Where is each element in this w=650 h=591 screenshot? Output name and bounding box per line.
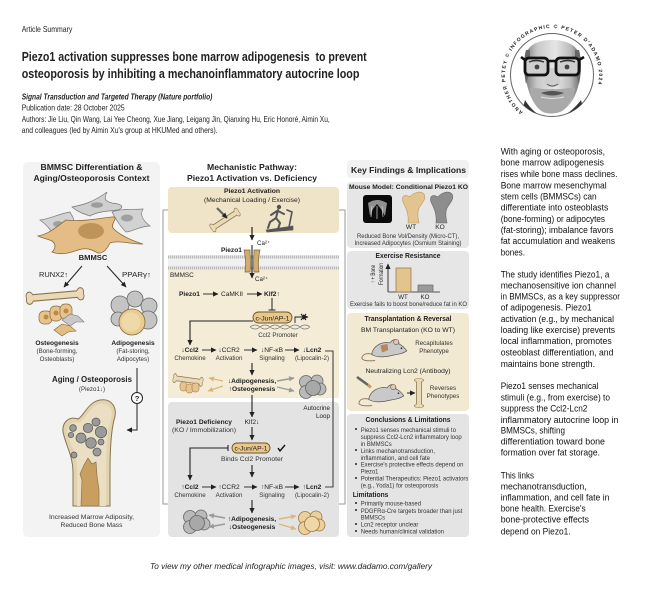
label: deficiency: Piezo1 Deficiency (176, 419, 232, 426)
row: upregulated cascade: ↑Ccl2 (181, 484, 199, 491)
labels: WT and KO: KO (435, 224, 445, 231)
icon: micro-CT (363, 195, 392, 223)
signalling row: CaMKII (221, 291, 243, 298)
citation details: and colleagues (led by Aimin Xu's group at HKUMed and others). (22, 125, 218, 135)
paragraph: mechanism: formation over fat storage. (501, 448, 600, 458)
arrows: grey outcome (209, 515, 225, 527)
arrows: tan outcome (208, 378, 223, 391)
label: binds promoter: Binds Ccl2 Promoter (221, 456, 283, 463)
list: conclusions: Potential Therapeutics: Piezo1 activators (361, 476, 468, 482)
citation details: Authors: Jie Liu, Qin Wang, Lai Yee Cheong, Xue Jiang, Leigang Jin, Qianxing Hu, Eric Honoré, Aimin Xu, (22, 114, 330, 124)
arrow: cascade to outcome (251, 500, 253, 513)
caption: mouse model: Reduced Bone Vol/Density (Micro-CT), (357, 233, 459, 240)
paragraph: mechanism (501, 381, 618, 458)
heading: aging: (Piezo1↓) (79, 386, 105, 393)
icon: grey adipocytes (300, 375, 326, 398)
signalling row (179, 291, 280, 298)
list: conclusions: Links mechanotransduction, (361, 448, 435, 455)
row: upregulated cascade (174, 484, 329, 499)
labels: WT and KO (406, 224, 445, 231)
label: adipogenesis: (Fat-storing, (116, 348, 150, 355)
paragraph: implication: bone-protective effects (501, 515, 589, 525)
footer note: To view my other medical infographic images, visit: www.dadamo.com/gallery (150, 561, 433, 571)
icon: check (278, 445, 285, 451)
row: upregulated cascade: Signaling (259, 492, 285, 499)
icon: syringe (357, 377, 371, 388)
label: osteogenesis: Osteoblasts) (40, 356, 74, 363)
icon: treated mouse (359, 384, 404, 406)
label: BMMSC: BMMSC (170, 272, 194, 279)
list: limitations: PDGFRα-Cre targets broader than just (361, 508, 463, 515)
citation details: Signal Transduction and Targeted Therapy (Nature portfolio) (22, 92, 213, 102)
label: adipogenesis: Adipocytes) (117, 356, 149, 363)
label: autocrine loop: Autocrine (303, 405, 330, 412)
label: calcium inside: Ca²⁺ (255, 276, 268, 283)
row: downregulated cascade: Activation (216, 355, 243, 362)
heading: left panel: Aging/Osteoporosis Context (34, 173, 150, 183)
title: Piezo1 activation suppresses bone marrow adipogenesis to prevent (22, 49, 367, 64)
panel: transplantation and reversal (347, 313, 469, 411)
paragraph: implication: bone health. Exercise's (501, 504, 586, 514)
paragraph: study: The study identifies Piezo1, a (501, 269, 609, 279)
list: conclusions (355, 427, 468, 490)
arrow: pill to Ccl2 (190, 321, 253, 345)
paragraph: background: bones. (501, 248, 525, 258)
side text: summary (501, 147, 620, 537)
caption: femur: Reduced Bone Mass (60, 522, 122, 529)
label: BMMSC: BMMSC (79, 253, 108, 262)
paragraph: implication: inflammation, and cell fate in (501, 493, 609, 503)
c-Jun pill (232, 443, 270, 453)
panel: transplantation and reversal: BM Transplantation (KO to WT) (361, 327, 455, 334)
row: downregulated cascade: Signaling (259, 355, 285, 362)
signalling row: Piezo1 (179, 291, 200, 298)
arrow: from outcome to Klf2 (251, 395, 253, 417)
c-Jun pill (253, 312, 292, 323)
list: conclusions: Piezo1 senses mechanical stimuli to (361, 427, 457, 434)
paragraph: mechanism: inflammatory autocrine loop in (501, 415, 618, 425)
paragraph: background: (fat-storing); imbalance favors (501, 225, 614, 235)
label: deficiency (172, 419, 236, 434)
paragraph: mechanism: Piezo1 senses mechanical (501, 381, 598, 391)
row: upregulated cascade: ↑NF-κB (261, 484, 284, 491)
icon: BMMSC cells (38, 192, 150, 254)
panel: transplantation and reversal: Neutralizing Lcn2 (Antibody) (366, 368, 450, 375)
caption: mouse model: Increased Adipocytes (Osmium Staining) (354, 240, 462, 247)
paragraph: study: mechanosensitive ion channel (501, 281, 616, 291)
panel: transplantation and reversal: Transplantation & Reversal (364, 316, 452, 323)
label: piezo1: Piezo1 (221, 247, 242, 254)
heading: aging (52, 375, 132, 393)
arrows: grey outcome (277, 378, 294, 391)
arrow: to adipogenesis (107, 266, 126, 287)
c-Jun pill: c-Jun/AP-1 (256, 316, 290, 322)
paragraph: background: (bone-forming) or adipocytes (501, 214, 605, 224)
DNA helix (250, 325, 310, 329)
panel: activated cell (168, 227, 339, 398)
panel: exercise resistance: Exercise Resistance (376, 253, 441, 260)
label: PPAR gamma: PPARγ↑ (122, 270, 151, 279)
heading: pathway: Mechanistic Pathway: (207, 162, 297, 172)
panel: mouse model (347, 182, 469, 248)
list: conclusions: inflammation, and cell fate (361, 455, 431, 462)
outcome: activation: ↑Osteogenesis (229, 386, 276, 393)
icon: question mark (132, 392, 142, 404)
panel: piezo1 activation stimulus: (Mechanical Loading / Exercise) (204, 197, 300, 204)
paragraph: background: rises while bone mass declines. (501, 169, 617, 179)
row: upregulated cascade: ↑CCR2 (218, 484, 240, 491)
label: deficiency: (KO / Immobilization) (172, 427, 236, 434)
row: downregulated cascade: ↓Lcn2 (303, 347, 322, 354)
paragraph: study: activation (e.g., by mechanical (501, 314, 614, 324)
citation details: Publication date: 28 October 2025 (22, 103, 125, 113)
arrow: to osteogenesis (64, 266, 82, 287)
icon: loaded bone (209, 207, 241, 233)
paragraph: study: osteoblast differentiation, and (501, 347, 613, 357)
heading: aging: Aging / Osteoporosis (52, 375, 132, 384)
icon: KO femur (430, 192, 453, 223)
label: reverses (427, 385, 459, 400)
panel: exercise resistance: Exercise fails to boost bone/reduce fat in KO (350, 301, 467, 308)
arrows: tan outcome (279, 516, 296, 529)
label: article summary: Article Summary (22, 24, 73, 34)
heading: left panel (34, 162, 150, 183)
list: limitations: Primarily mouse-based (361, 500, 422, 508)
bar chart: KO (421, 294, 430, 301)
label: Klf2 down: Klf2↓ (245, 419, 259, 426)
arrow: Klf2 to pill (251, 427, 253, 440)
portrait badge (502, 24, 602, 117)
label: adipogenesis (111, 340, 155, 363)
paragraph: mechanism: stimuli (e.g., from exercise) to (501, 393, 610, 403)
outcome: deficiency: ↓Osteogenesis (229, 524, 276, 531)
outcome: activation (228, 378, 276, 393)
row: downregulated cascade: ↓NF-κB (261, 347, 284, 354)
arrow: adipogenesis to marrow (127, 368, 137, 430)
icon: bone and osteoblasts (26, 287, 84, 336)
icon: runner on treadmill (266, 205, 293, 232)
cell frame (163, 210, 345, 504)
label: osteogenesis: (Bone-forming, (37, 348, 78, 355)
signalling row: Klf2↑ (264, 291, 280, 298)
paragraph: study: local inflammation, promotes (501, 336, 612, 346)
panel: conclusions and limitations: Conclusions & Limitations (366, 417, 451, 424)
autocrine loop line (325, 351, 333, 487)
bar chart (371, 263, 440, 301)
icon: grey adipocytes (184, 510, 210, 534)
row: downregulated cascade: Chemokine (174, 355, 206, 362)
list: limitations: Lcn2 receptor unclear (361, 522, 418, 528)
icon: adipocytes (111, 291, 157, 335)
panel: conclusions and limitations (347, 414, 469, 537)
heading: left panel: BMMSC Differentiation & (40, 162, 142, 172)
row: upregulated cascade: ↑Lcn2 (303, 484, 322, 491)
inhibition bar (268, 298, 276, 310)
panel: BMMSC differentiation and aging context (23, 162, 160, 537)
illustration: femur with marrow fat (63, 400, 115, 506)
panel: piezo1 activation stimulus: Piezo1 Activation (224, 188, 280, 195)
paragraph: background: stem cells (BMMSCs) can (501, 192, 597, 202)
label: recapitulates (415, 340, 453, 355)
arrow: cascade to outcome (251, 363, 253, 375)
paragraph: background: Bone marrow mesenchymal (501, 180, 607, 190)
label: reverses: Phenotypes (427, 393, 459, 400)
paragraph: background (501, 147, 617, 258)
icon: question mark: ? (135, 394, 140, 403)
row: downregulated cascade: (Lipocalin-2) (295, 355, 329, 362)
labels: WT and KO: WT (406, 224, 416, 231)
bar chart: Formation (379, 263, 385, 285)
bar chart: ↑ + Bone (371, 265, 377, 283)
arrow: calcium through (251, 245, 253, 278)
row: upregulated cascade: Chemokine (174, 492, 206, 499)
list: conclusions: suppress Ccl2-Lcn2 inflammatory loop (361, 434, 462, 441)
paragraph: background: bone marrow adipogenesis (501, 158, 604, 168)
icon: piezo1 channel (244, 250, 260, 272)
label: autocrine loop (303, 405, 330, 420)
heading: pathway (187, 162, 317, 183)
label: autocrine loop: Loop (316, 413, 330, 420)
paragraph: study: loading like exercise) prevents (501, 325, 615, 335)
paragraph: mechanism: BMMSCs, shifting (501, 426, 565, 436)
label: adipogenesis: Adipogenesis (111, 340, 155, 347)
panel: piezo1 activation stimulus (168, 187, 339, 233)
list: limitations (355, 500, 463, 536)
panel: piezo1 deficiency (168, 395, 339, 537)
title (22, 49, 367, 81)
panel: mechanistic pathway (163, 162, 345, 537)
outcome: deficiency (228, 516, 276, 531)
label: recapitulates: Recapitulates (415, 340, 453, 347)
citation details (22, 92, 330, 135)
icon: bone cluster (172, 373, 204, 393)
label: reverses: Reverses (430, 385, 456, 392)
panel: mouse model: Mouse Model: Conditional Piezo1 KO (349, 184, 468, 191)
panel: key findings (347, 160, 469, 537)
heading: pathway: Piezo1 Activation vs. Deficiency (187, 173, 317, 183)
list: conclusions: Piezo1 (361, 468, 379, 476)
list: conclusions: Exercise's protective effects depend on (361, 462, 464, 468)
icon: tan adipocytes (298, 511, 325, 534)
icon: mouse transplanted (362, 339, 407, 361)
paragraph: study: maintains bone strength. (501, 359, 595, 369)
caption: mouse model (354, 233, 462, 247)
label: calcium: Ca²⁺ (257, 240, 270, 247)
paragraph: background: differentiate into osteoblasts (501, 202, 609, 212)
arrow: calcium in (251, 227, 253, 240)
paragraph: mechanism: differentiation toward bone (501, 437, 605, 447)
arrow: promoter to cascade (251, 465, 253, 477)
heading: key findings: Key Findings & Implications (351, 165, 466, 175)
label: ccl2 promoter: Ccl2 Promoter (258, 332, 298, 339)
label: RUNX2: RUNX2↑ (39, 270, 68, 279)
c-Jun pill: c-Jun/AP-1 (234, 446, 268, 452)
outcome: deficiency: ↑Adipogenesis, (228, 516, 276, 523)
list: conclusions: in BMMSCs (361, 441, 392, 448)
paragraph: implication: This links (501, 471, 534, 481)
icon: restored bone (415, 379, 423, 407)
caption: femur: Increased Marrow Adiposity, (49, 514, 134, 521)
label: recapitulates: Phenotype (419, 348, 449, 355)
paragraph: study (501, 269, 620, 369)
row: downregulated cascade: ↓CCR2 (218, 347, 240, 354)
caption: femur (49, 514, 134, 529)
title: osteoporosis by inhibiting a mechanoinflammatory autocrine loop (22, 66, 359, 81)
paragraph: implication (501, 471, 609, 537)
row: upregulated cascade: Activation (216, 492, 243, 499)
paragraph: implication: depend on Piezo1. (501, 527, 571, 537)
row: downregulated cascade: ↓Ccl2 (181, 347, 199, 354)
heading: key findings (347, 160, 469, 178)
header text (22, 24, 367, 135)
list: limitations: Needs human/clinical validation (361, 528, 445, 536)
outcome: activation: ↓Adipogenesis, (228, 378, 276, 385)
arrow: to bone (407, 392, 415, 394)
heading: limitations: Limitations (353, 492, 388, 499)
arrow: pill to Ccl2 (190, 445, 228, 480)
paragraph: mechanism: suppress the Ccl2-Lcn2 (501, 404, 587, 414)
paragraph: implication: mechanotransduction, (501, 482, 587, 492)
panel: exercise resistance (347, 251, 469, 309)
icon: WT femur (402, 192, 425, 223)
badge ring text: ANOTHER PETEY © INFOGRAPHIC © PETER D'ADAMO 2024 (502, 24, 602, 114)
paragraph: background: With aging or osteoporosis, (501, 147, 605, 157)
list: limitations: BMMSCs (361, 514, 385, 522)
list: conclusions: (e.g., Yoda1) for osteoporosis (361, 482, 438, 490)
membrane (168, 255, 339, 270)
bar chart: WT (398, 294, 408, 301)
label: osteogenesis: Osteogenesis (35, 340, 79, 347)
row: downregulated cascade (174, 347, 329, 362)
paragraph: study: of adipogenesis. Piezo1 (501, 303, 592, 313)
label: osteogenesis (35, 340, 79, 363)
blocked promoter arrow (295, 314, 308, 323)
paragraph: background: fat accumulation and weakens (501, 236, 615, 246)
paragraph: study: in BMMSCs, as a key suppressor (501, 292, 620, 302)
row: upregulated cascade: (Lipocalin-2) (295, 492, 329, 499)
